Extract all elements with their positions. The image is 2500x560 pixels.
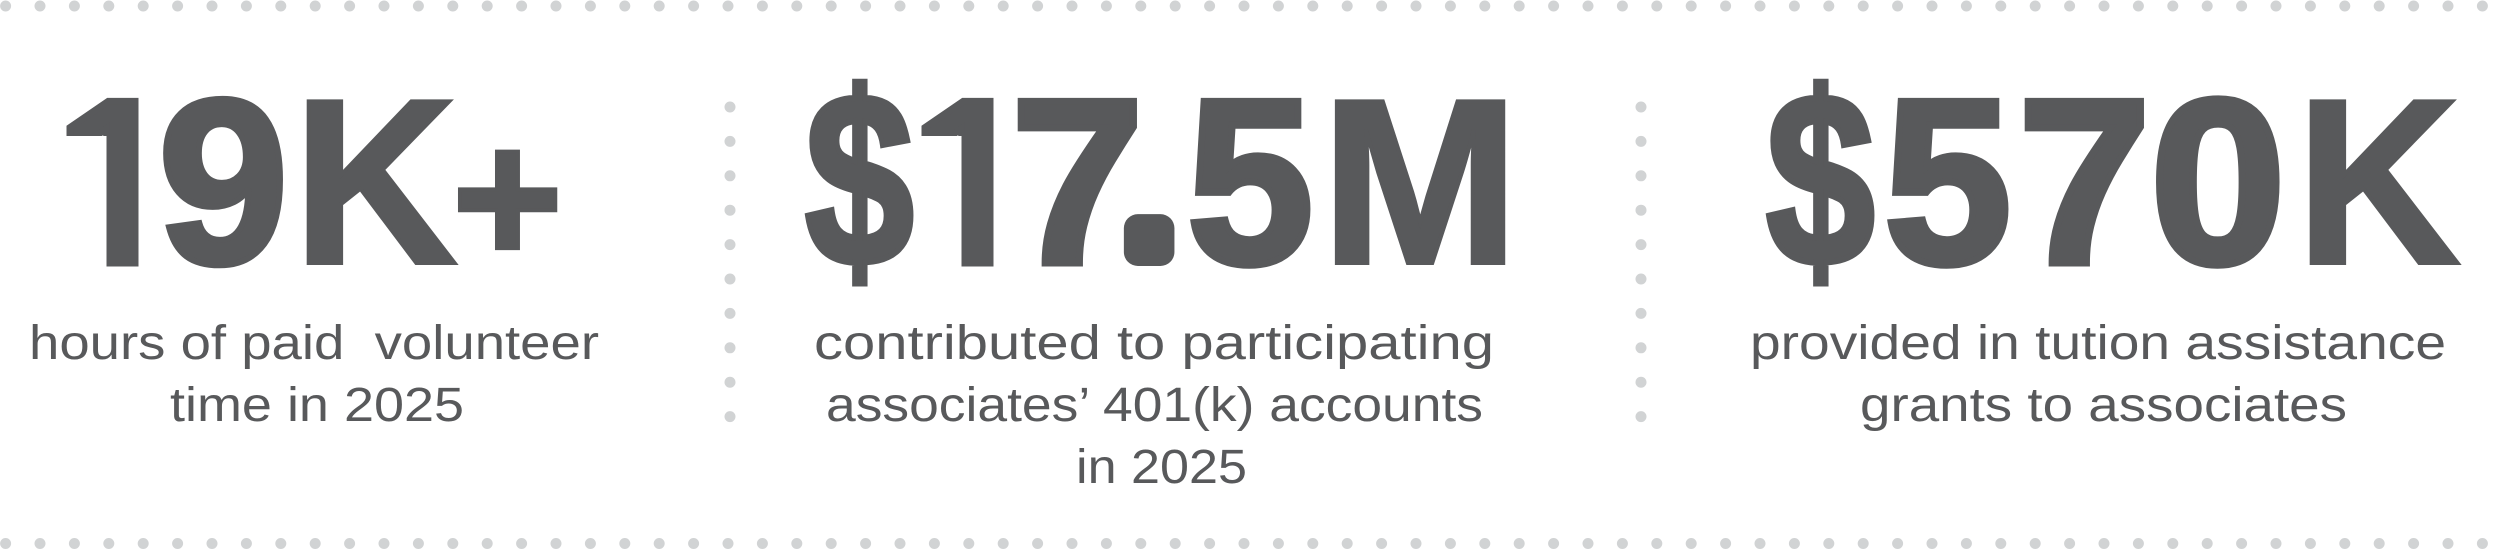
big number: $17.5M: $ [805, 42, 914, 318]
dotted divider: left [724, 107, 736, 420]
big number: $570K: $ [1766, 42, 1875, 318]
caption: tuition assistance: grants to associates [1860, 379, 2347, 432]
panel: tuition assistance [1750, 42, 2460, 432]
caption: 401(k) contributions [814, 317, 1494, 494]
big number: 19K+: 1 [55, 51, 178, 313]
big number: 19K+: K [294, 50, 457, 313]
big number: $570K: 7 [2018, 51, 2151, 314]
big number: $17.5M [804, 78, 1506, 286]
dotted border: bottom [6, 538, 2500, 549]
big number: $570K [1766, 42, 2460, 318]
panel: volunteer hours [32, 96, 598, 422]
big number: $17.5M: 1 [910, 51, 1033, 313]
big number: 19K+: 9 [158, 50, 289, 313]
caption: 401(k) contributions: contributed to participating [814, 317, 1494, 370]
caption: tuition assistance: provided in tution assistance [1750, 317, 2446, 370]
caption: volunteer hours [29, 317, 599, 432]
big number: $17.5M: . [1127, 107, 1171, 286]
big number: $17.5M: 5 [1187, 51, 1313, 313]
caption: volunteer hours: time in 2025 [170, 379, 464, 432]
big number: $17.5M: 7 [1011, 51, 1144, 314]
big number: $570K: K [2296, 50, 2460, 313]
caption: tuition assistance [1750, 317, 2446, 432]
dotted divider: right [1636, 107, 1646, 420]
caption: volunteer hours: hours of paid volunteer [29, 317, 599, 370]
big number: $570K: 5 [1884, 51, 2011, 314]
big number: $570K: 0 [2150, 50, 2286, 313]
panel: 401(k) contributions [804, 78, 1506, 484]
big number: 19K+ [66, 96, 558, 268]
caption: 401(k) contributions: associates’ 401(k) accounts [826, 379, 1483, 432]
big number: 19K+: + [452, 92, 563, 304]
caption: 401(k) contributions: in 2025 [1076, 441, 1247, 494]
big number: $17.5M: M [1321, 51, 1519, 314]
dotted border: top [6, 0, 2500, 12]
